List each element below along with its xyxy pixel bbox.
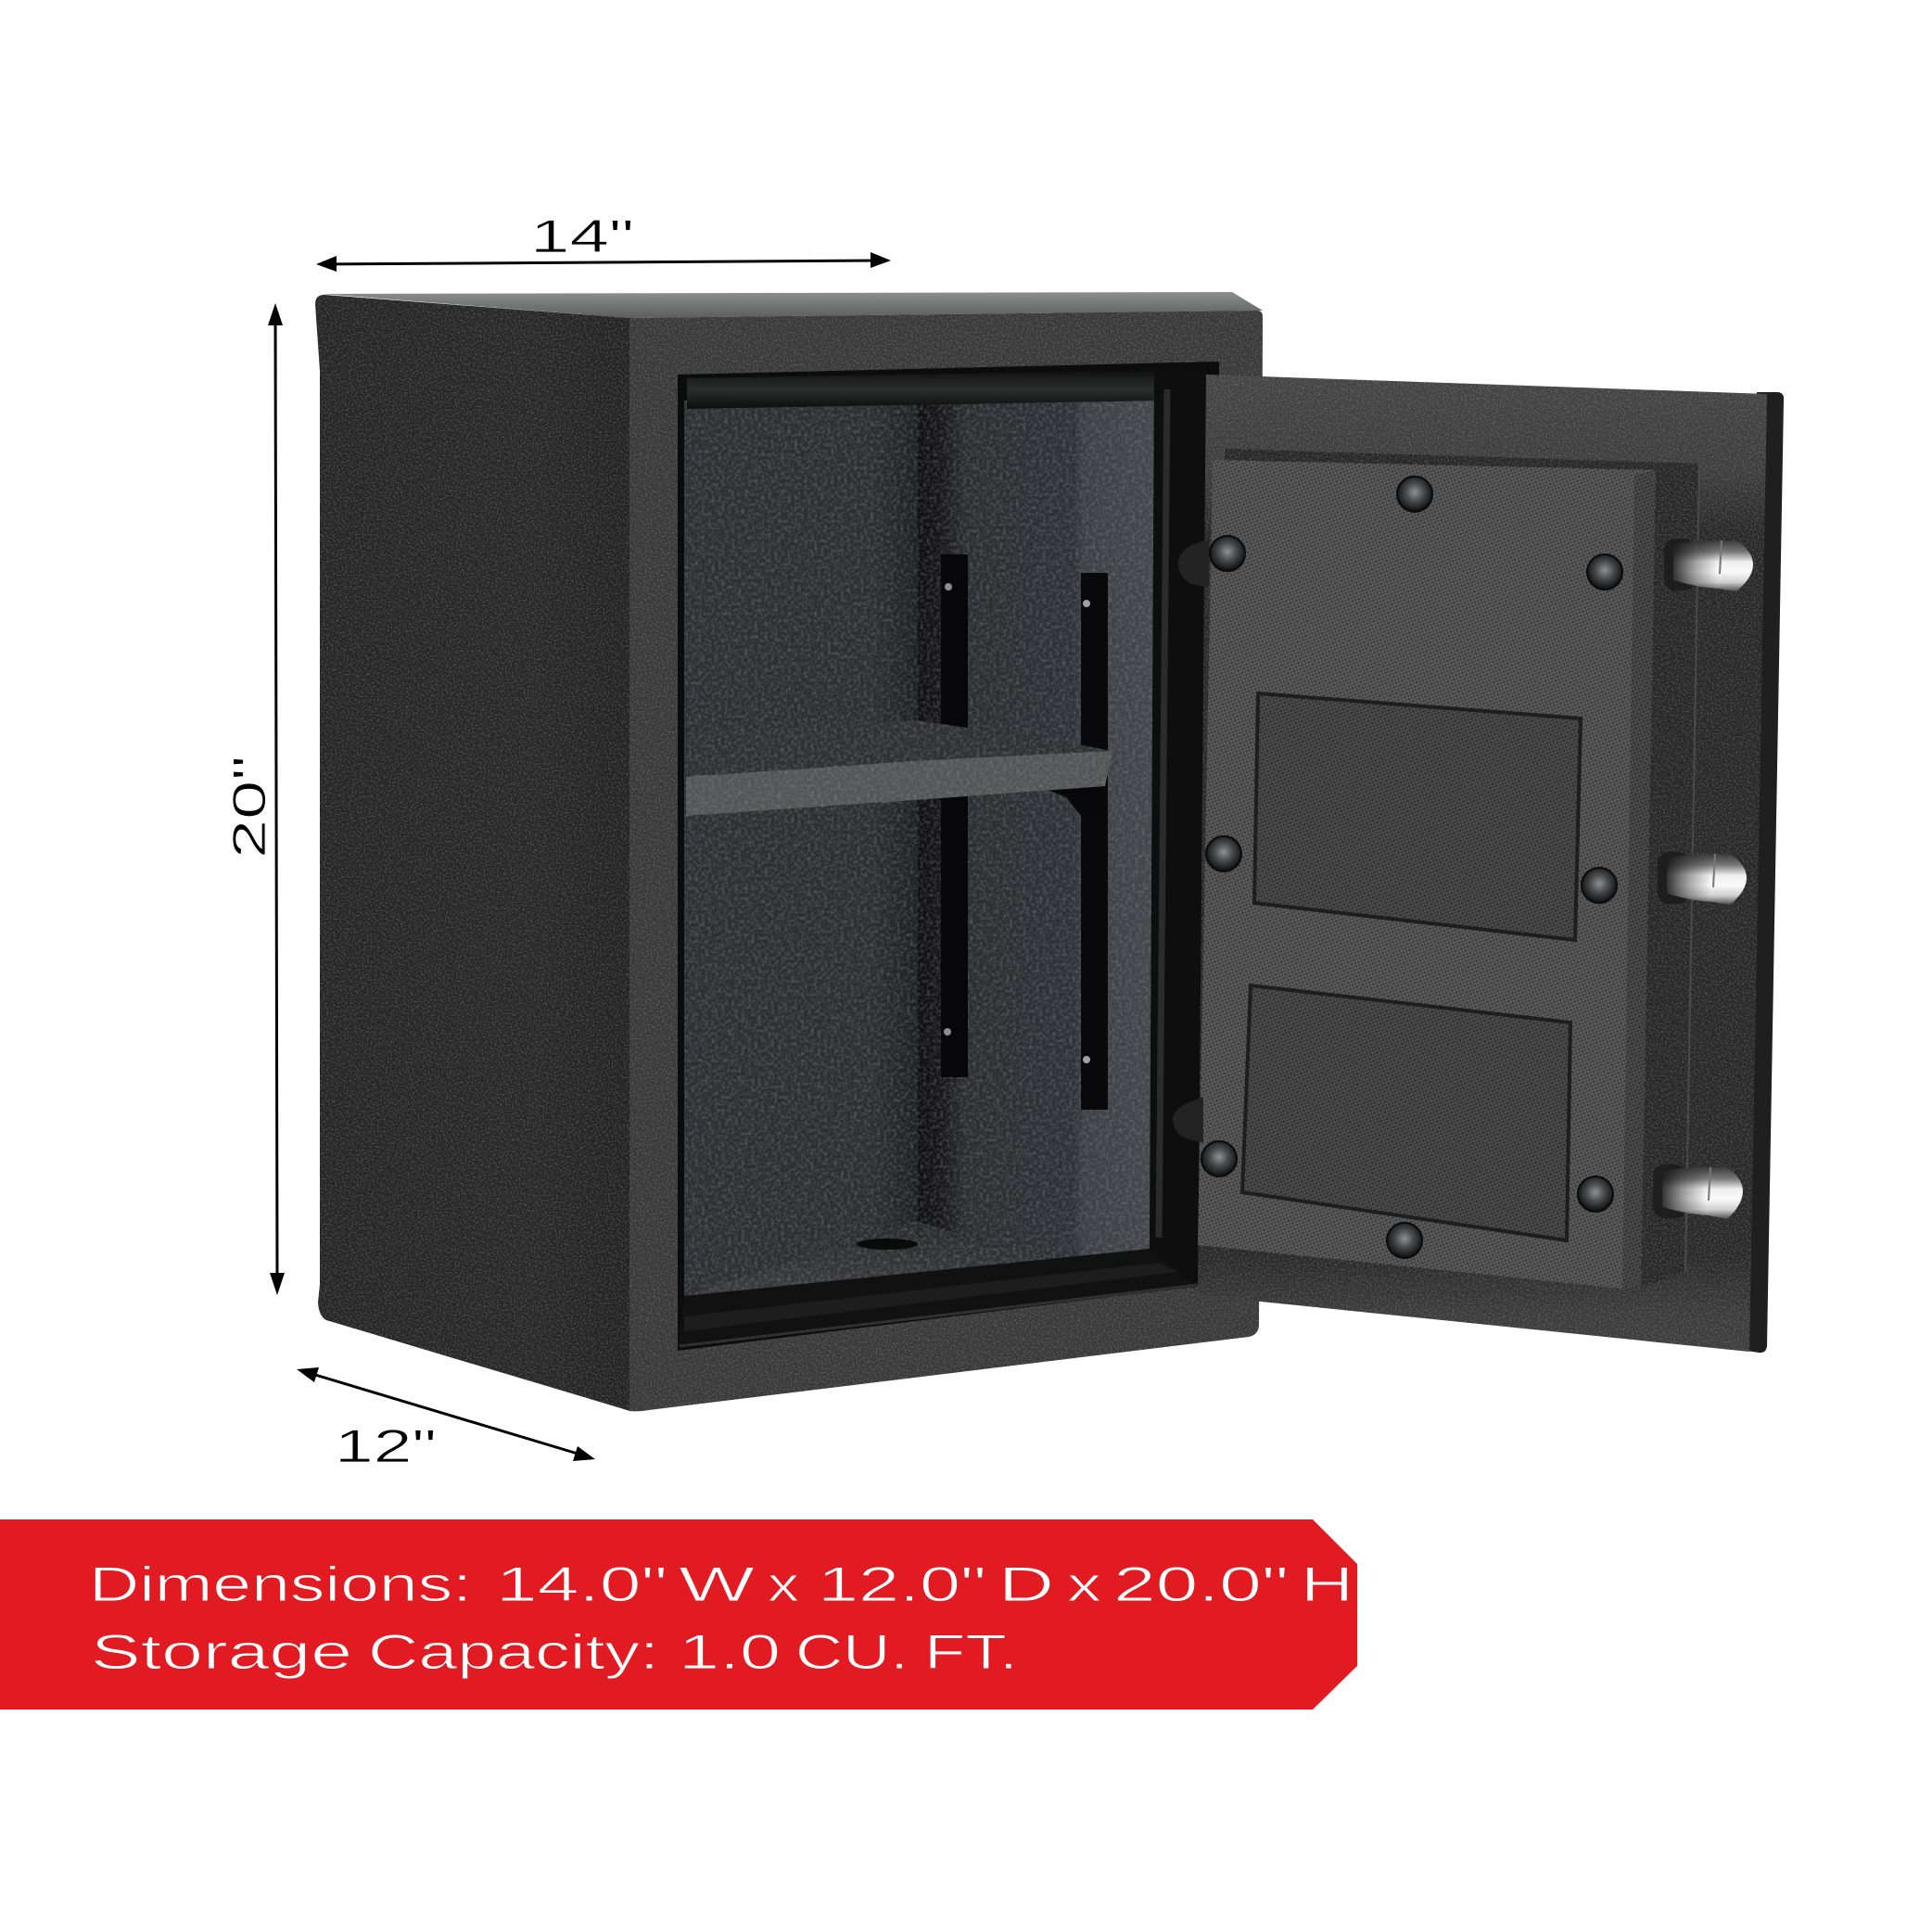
shelf (684, 720, 1112, 816)
fabric panel bevel (1622, 470, 1656, 1289)
dimensions text: x (1067, 1557, 1101, 1612)
top locking bolt (1664, 539, 1753, 591)
raised lining box (1225, 449, 1699, 1287)
dimensions text (89, 1557, 1354, 1612)
capacity text: Storage (91, 1625, 352, 1680)
dimensions text: 20.0" (1113, 1557, 1289, 1612)
depth label: 12" (335, 1420, 437, 1472)
dimensions text: H (1301, 1557, 1354, 1612)
dimensions text: D (998, 1557, 1054, 1612)
capacity text: Capacity: (368, 1625, 659, 1680)
upper hinge knob (1178, 539, 1209, 588)
left interior wall felt (684, 400, 920, 1296)
dimensions text: Dimensions: (89, 1557, 472, 1612)
height label: 20" (223, 756, 275, 858)
safe body (315, 292, 1263, 1411)
front frame (629, 311, 1263, 1411)
capacity text (91, 1625, 1018, 1680)
door inner face (1198, 375, 1767, 1352)
door edge (1741, 392, 1784, 1353)
lower mesh pocket (1242, 985, 1570, 1240)
left shelf rail (941, 554, 968, 1077)
capacity text: FT. (924, 1625, 1018, 1680)
shelf front edge (686, 751, 1112, 816)
left side face (315, 295, 629, 1411)
dimensions text: 14.0" (496, 1557, 667, 1612)
shelf bracket (1048, 784, 1105, 816)
dimensions text: x (768, 1557, 799, 1612)
rivets (1201, 477, 1622, 1258)
top door seal tube (687, 370, 1166, 409)
top face (321, 292, 1263, 318)
middle locking bolt (1658, 852, 1747, 905)
bottom door seal (678, 1249, 1198, 1346)
dimensions text: 12.0" (818, 1557, 986, 1612)
right door seal (1150, 363, 1207, 1289)
lower hinge knob (1173, 1097, 1203, 1143)
upper mesh pocket (1254, 693, 1581, 940)
back interior wall felt (918, 399, 1154, 1261)
right shelf rail (1081, 573, 1108, 1110)
shelf top surface (684, 720, 1112, 777)
floor bolt hole (857, 1239, 918, 1250)
depth arrow (297, 1367, 595, 1461)
red specification banner (0, 1519, 1357, 1710)
capacity text: 1.0 (679, 1625, 781, 1680)
width arrow (316, 252, 891, 272)
bottom locking bolt (1653, 1164, 1743, 1219)
capacity text: CU. (795, 1625, 909, 1680)
interior floor felt (684, 1221, 1052, 1296)
door opening frame (678, 362, 1219, 1351)
height arrow (268, 303, 285, 1295)
dimensions text: W (679, 1557, 755, 1612)
banner shape (0, 1519, 1357, 1710)
fabric panel (1198, 460, 1656, 1289)
open door (1173, 375, 1784, 1353)
width label: 14" (530, 210, 634, 262)
